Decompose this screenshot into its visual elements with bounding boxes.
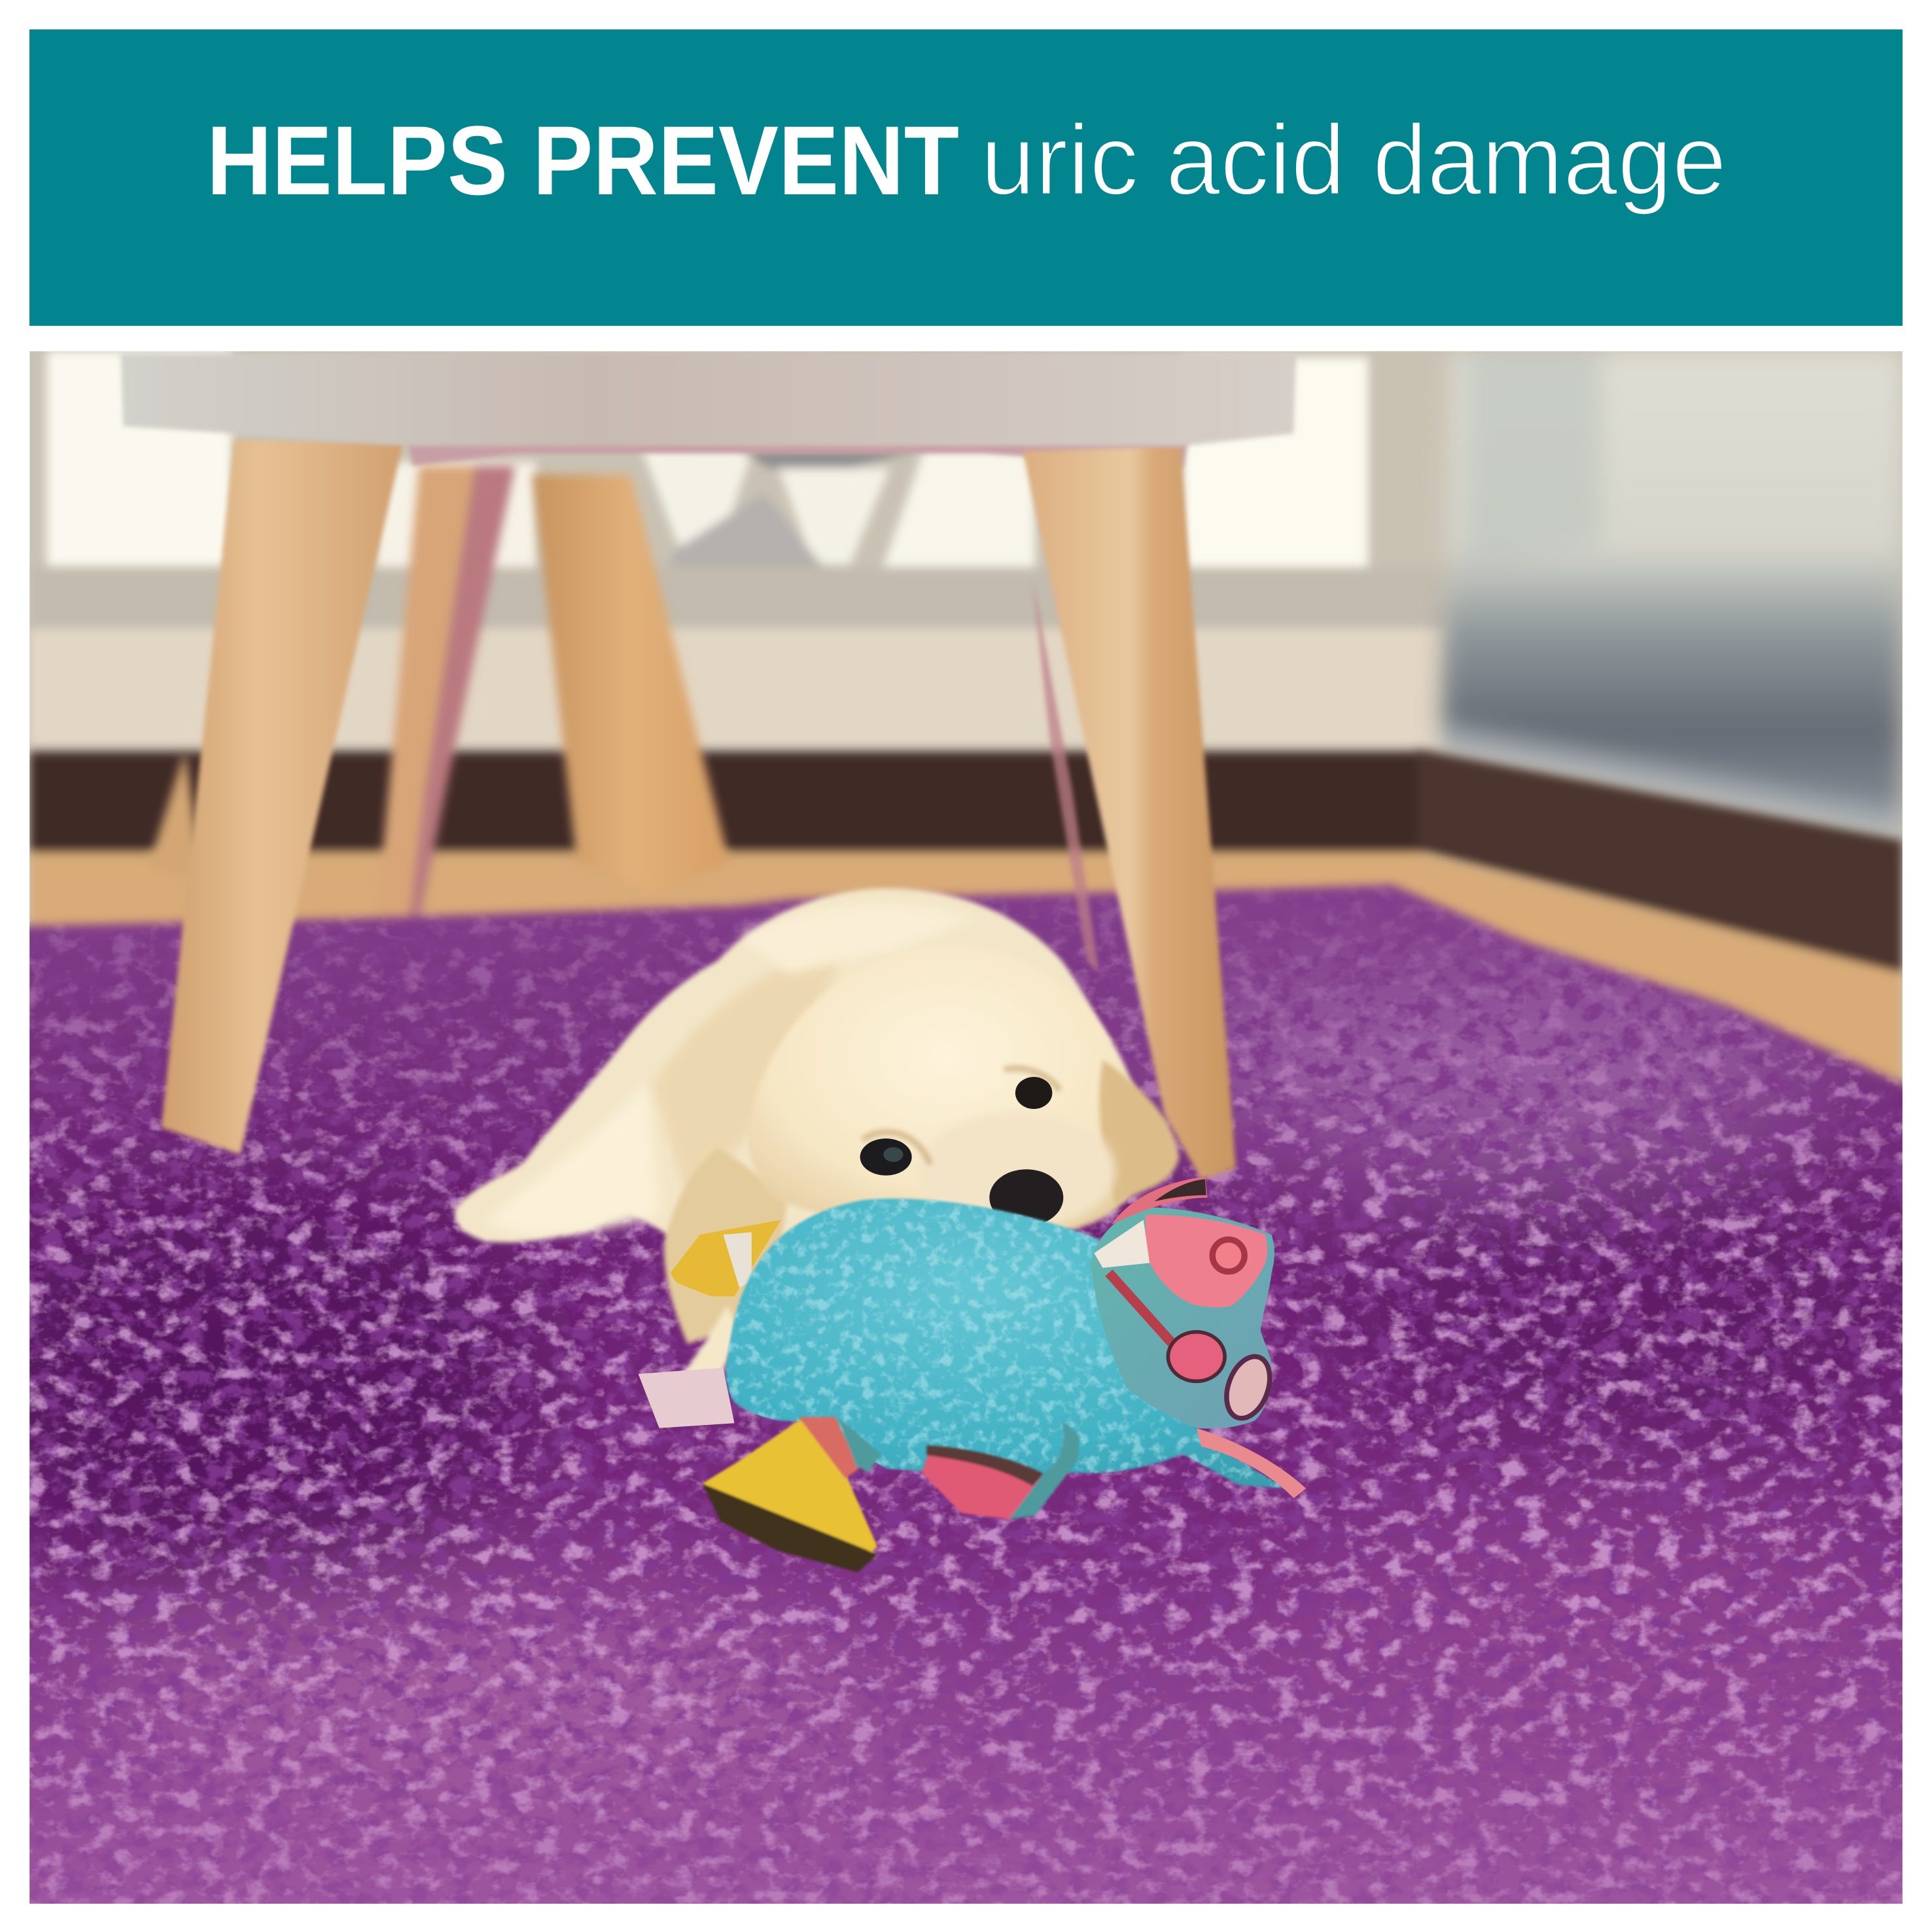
toy pink circle (1168, 1332, 1225, 1381)
front left leg (162, 440, 403, 1155)
puppy eye glint (883, 1147, 903, 1162)
puppy (455, 888, 1179, 1378)
plush toy (639, 1177, 1306, 1572)
toy fur texture (721, 1189, 1293, 1491)
toy pink patch (1146, 1215, 1267, 1307)
banner background (29, 29, 1903, 326)
banner (29, 29, 1903, 326)
pink side of right leg (1032, 579, 1099, 974)
toy eye (1219, 1350, 1278, 1424)
toy red band (1109, 1273, 1173, 1344)
puppy nose (989, 1169, 1063, 1226)
puppy muzzle (918, 1112, 1115, 1230)
right blurred wall (1441, 351, 1903, 838)
toy top ear (1112, 1177, 1208, 1225)
puppy body (455, 888, 1109, 1282)
puppy eye left (860, 1138, 912, 1176)
toy blue body (726, 1199, 1288, 1488)
baseboard and wood floor (29, 749, 1903, 1109)
back table legs (148, 466, 729, 955)
toy head (1091, 1208, 1274, 1429)
toy pink foot (922, 1420, 1080, 1519)
toy right leg (1197, 1428, 1306, 1498)
toy yellow boot (702, 1417, 881, 1572)
rug tonal patches (0, 924, 1932, 1799)
toy stripe (1094, 1220, 1150, 1268)
puppy brow shadow (862, 1068, 1060, 1165)
rug (0, 862, 1932, 1932)
front right leg (1023, 446, 1236, 1179)
puppy head (748, 946, 1144, 1235)
table top (121, 354, 1296, 446)
table underside (406, 434, 1189, 468)
room background (29, 351, 1903, 1904)
puppy right ear (1099, 1060, 1179, 1205)
title (207, 104, 1727, 216)
rug texture (0, 862, 1932, 1932)
puppy left ear and paw (664, 1147, 787, 1378)
toy tag (639, 1367, 734, 1428)
puppy eye right (1015, 1077, 1052, 1109)
table (121, 354, 1296, 1179)
toy yellow foot (671, 1220, 781, 1296)
title light part: uric acid damage (981, 104, 1727, 216)
title bold part: HELPS PREVENT (207, 105, 959, 215)
toy target eye (1212, 1240, 1244, 1272)
